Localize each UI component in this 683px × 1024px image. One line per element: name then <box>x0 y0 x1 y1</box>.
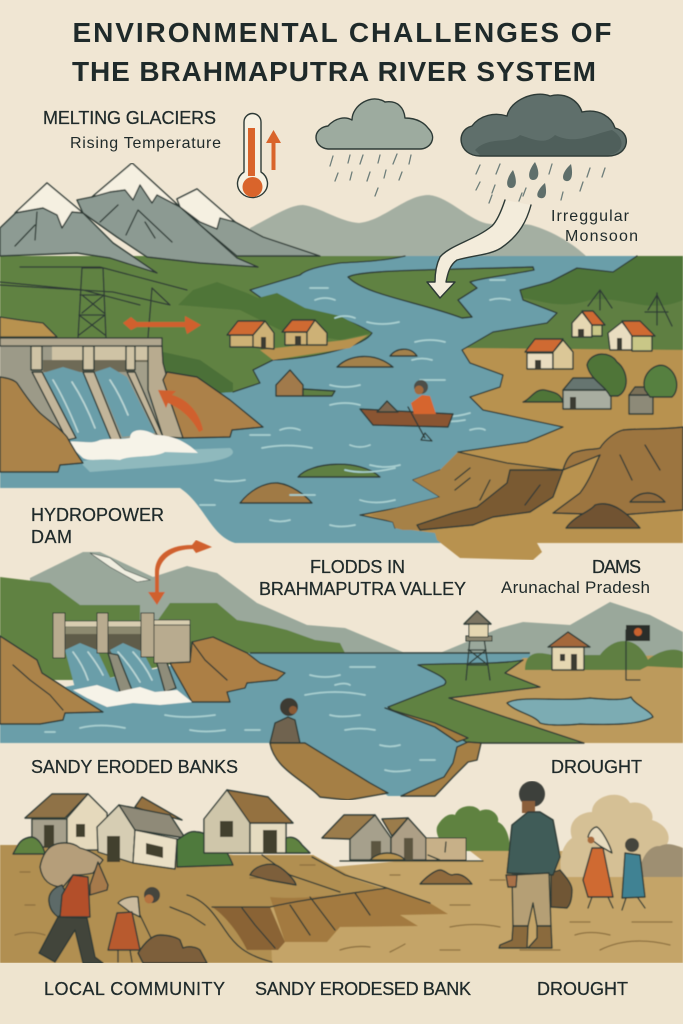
pond <box>507 697 653 725</box>
right green land <box>462 256 683 350</box>
label: dams arunachal pradesh: DAMS <box>592 557 641 577</box>
river banks below <box>270 742 481 800</box>
rock <box>138 935 207 963</box>
icon: thermometer <box>238 114 268 198</box>
panel: middle valley scene <box>0 540 683 800</box>
far mountains <box>250 195 588 258</box>
houses left <box>227 320 327 349</box>
middle foam <box>73 685 192 707</box>
brown rocks around dam <box>163 372 263 438</box>
snow cap <box>90 553 150 582</box>
right dark canopy <box>520 256 683 306</box>
label: local community: LOCAL COMMUNITY <box>44 979 225 999</box>
house 3 <box>204 790 293 853</box>
red double arrow <box>123 316 201 334</box>
label: rising temperature: Rising Temperature <box>70 135 221 152</box>
person carrying sack <box>39 843 108 963</box>
ground cracks <box>15 865 672 952</box>
house 2 <box>97 797 185 869</box>
icon: heavy rain cloud <box>461 94 626 203</box>
mountains middle <box>30 552 405 653</box>
label: dams arunachal pradesh <box>501 557 650 597</box>
grey dust <box>638 844 683 877</box>
lower ground <box>0 845 683 963</box>
right far mountain <box>440 602 683 665</box>
bush right of house 3 <box>286 837 310 853</box>
label: floods in valley <box>259 557 466 599</box>
erosion cliffs right <box>370 427 683 530</box>
hill slope <box>0 845 387 963</box>
mud strip <box>385 708 468 742</box>
label: irregular monsoon <box>551 208 638 245</box>
women walking <box>583 827 645 910</box>
label: floods in valley: BRAHMAPUTRA VALLEY <box>259 579 466 599</box>
title: THE BRAHMAPUTRA RIVER SYSTEM <box>72 56 596 87</box>
green hills <box>0 577 345 680</box>
dam upper left <box>0 338 183 442</box>
label: dams arunachal pradesh: Arunachal Pradesh <box>501 578 650 597</box>
shoreline left <box>233 256 405 392</box>
panel: lower community scene <box>0 781 683 963</box>
label: sandy eroded banks: SANDY ERODED BANKS <box>31 757 238 777</box>
flooded house and mounds <box>240 349 417 503</box>
tan hill top left <box>0 317 57 337</box>
middle waves <box>45 667 435 772</box>
red curved arrow <box>158 390 203 432</box>
bottom strip <box>0 963 683 1024</box>
panel: upper river scene <box>0 163 683 560</box>
mound rocks <box>250 864 296 885</box>
dark bushes by dam <box>163 352 233 395</box>
right land <box>360 256 683 560</box>
snow mountains <box>0 163 320 273</box>
label: drought footer: DROUGHT <box>537 979 628 999</box>
foam <box>66 430 198 460</box>
label: sandy erodesed bank: SANDY ERODESED BANK <box>255 979 471 999</box>
river middle <box>0 653 530 796</box>
arrow: monsoon runoff <box>427 200 531 298</box>
dust cloud <box>560 795 683 877</box>
woman bending <box>108 887 160 962</box>
title <box>72 17 612 87</box>
watchtower <box>464 611 492 680</box>
label: irregular monsoon: Monsoon <box>565 228 638 245</box>
green bank <box>388 660 584 743</box>
flag <box>626 625 650 680</box>
river upper <box>0 256 683 543</box>
icon: rising arrow <box>266 130 281 170</box>
village houses right <box>525 311 655 414</box>
label: floods in valley: FLODDS IN <box>310 557 405 577</box>
bushes <box>178 282 372 340</box>
label: hydropower dam <box>31 505 164 547</box>
green land upper left <box>0 256 405 400</box>
label: hydropower dam: HYDROPOWER <box>31 505 164 525</box>
erosion terraces <box>170 855 448 962</box>
bush left <box>13 837 45 854</box>
transmission tower and lines <box>0 267 187 338</box>
middle brown hills <box>0 636 285 724</box>
bush centre <box>177 832 233 867</box>
tan land <box>449 655 683 743</box>
village trees <box>523 354 677 402</box>
label: drought: DROUGHT <box>551 757 642 777</box>
label: hydropower dam: DAM <box>31 527 72 547</box>
horizon line <box>250 652 530 654</box>
standing man <box>499 781 572 948</box>
trees right <box>437 806 510 851</box>
pine trees <box>588 290 672 326</box>
brown rocks left <box>0 377 83 472</box>
seated figure <box>270 698 300 743</box>
title: ENVIRONMENTAL CHALLENGES OF <box>72 17 612 48</box>
green peninsula <box>348 267 534 318</box>
middle dam <box>53 613 190 692</box>
boat and rower <box>360 380 453 441</box>
house 1 <box>25 794 107 850</box>
label: irregular monsoon: Irreggular <box>551 208 630 225</box>
label: melting glaciers: MELTING GLACIERS <box>43 108 216 128</box>
sand strip by houses <box>260 335 368 360</box>
foam pool <box>80 448 233 472</box>
river waves <box>200 280 510 526</box>
right houses <box>322 815 483 884</box>
icon: light rain cloud <box>316 99 433 196</box>
right shoreline <box>360 256 637 528</box>
red curved arrow middle <box>148 540 212 605</box>
bushes and village house <box>525 632 683 670</box>
